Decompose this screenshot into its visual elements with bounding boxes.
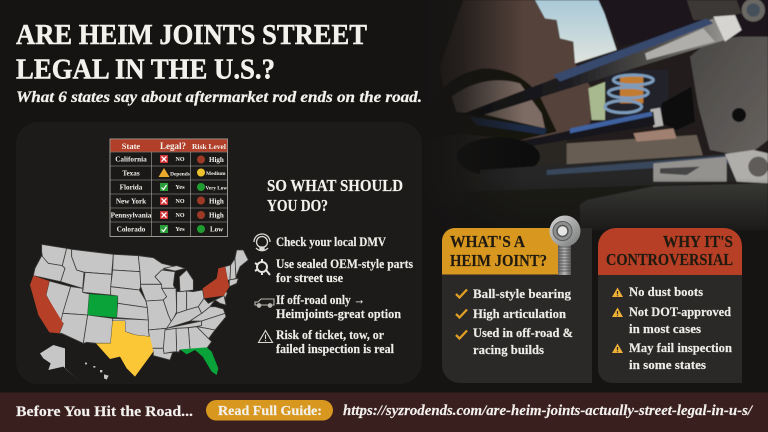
advice: risk: failed inspection is real (276, 342, 395, 356)
table: state legality: State (122, 141, 140, 151)
table: state legality: Texas (122, 170, 140, 178)
advice: off-road option: If off-road only → (276, 293, 365, 307)
heading: so what should you do: SO WHAT SHOULD (267, 176, 403, 195)
icon: off-road truck (255, 299, 274, 307)
advice: off-road option: Heimjoints-great option (276, 307, 401, 321)
title: LEGAL IN THE U.S.? (16, 54, 275, 86)
middle block (567, 135, 703, 167)
state: California (30, 276, 63, 333)
advice: sealed parts: Use sealed OEM-style parts (276, 257, 413, 271)
footer bar (0, 392, 768, 432)
heading: HEIM JOINT? (450, 251, 547, 270)
panel: why it's controversial (598, 228, 742, 383)
table: state legality: High (209, 212, 224, 220)
state: New York and Pennsylvania (203, 267, 229, 298)
table: state legality: High (209, 198, 224, 206)
table: state legality: High (209, 156, 224, 164)
heading: so what should you do: YOU DO? (267, 196, 328, 215)
advice: risk: Risk of ticket, tow, or (276, 328, 384, 342)
panel: states and advice (16, 122, 422, 384)
icon: warning triangle (258, 330, 272, 342)
card header (442, 228, 562, 274)
icon: gear and magnifier (255, 259, 270, 275)
heading: so what should you do (267, 176, 403, 215)
upper arm (463, 18, 730, 117)
advice: sealed parts (276, 257, 413, 285)
chassis dark top (598, 0, 768, 100)
title: ARE HEIM JOINTS STREET (16, 20, 367, 51)
tire tread (440, 0, 595, 140)
checklist: High articulation (473, 307, 566, 321)
table: state legality: Pennsylvania (111, 212, 152, 220)
side plate (690, 37, 768, 157)
heading: CONTROVERSIAL (606, 250, 733, 269)
panel: what's a heim joint (442, 216, 592, 383)
table: state legality: New York (116, 198, 146, 206)
icon: DMV badge (254, 234, 270, 251)
table: state legality: NO (176, 199, 185, 205)
footer link: https://syzrodends.com/are-heim-joints-actually-street-legal-in-u-s/ (343, 403, 754, 419)
wheel hub (420, 68, 557, 140)
state: Florida (180, 347, 218, 375)
warning list: May fail inspection (629, 341, 732, 355)
map: United States (30, 244, 248, 380)
heading (606, 232, 733, 269)
warning list: in most cases (629, 322, 701, 336)
table: state legality: NO (176, 213, 185, 219)
checklist: Ball-style bearing (473, 287, 572, 301)
footer lead text: Before You Hit the Road... (16, 404, 193, 420)
state: Texas (96, 321, 153, 377)
advice: sealed parts: for street use (276, 271, 343, 285)
table: state legality: Risk Level (192, 142, 226, 151)
table: state legality: Legal? (160, 141, 186, 151)
button: read full guide (206, 400, 333, 420)
road (580, 183, 768, 230)
photo: suspension arms (420, 0, 768, 240)
heading (450, 232, 547, 270)
warning list: in some states (629, 358, 706, 372)
state: Alaska (40, 345, 78, 380)
checklist: racing builds (473, 343, 544, 357)
subtitle: What 6 states say about aftermarket rod ends on the road. (16, 89, 422, 106)
inner boot (457, 137, 540, 176)
title (16, 20, 367, 86)
boot (662, 87, 695, 130)
table: state legality: Yes (175, 226, 185, 233)
table: state legality: Low (210, 226, 224, 234)
heading: WHY IT'S (663, 232, 733, 251)
state: Colorado (88, 294, 118, 318)
checklist: Used in off-road & (473, 326, 573, 340)
card header (598, 228, 742, 275)
table: state legality: Medium (206, 171, 226, 177)
warning list: Not DOT-approved (629, 305, 731, 319)
table: state legality: NO (176, 157, 185, 163)
lower arm (480, 153, 735, 193)
advice: risk (276, 328, 395, 356)
table: state legality: Depends (170, 171, 190, 177)
button: read full guide: Read Full Guide: (218, 403, 322, 418)
table: state legality: California (115, 156, 147, 164)
checklist (456, 287, 573, 357)
table: state legality: Yes (175, 184, 185, 191)
table: state legality (110, 139, 228, 236)
table: state legality: Florida (120, 184, 143, 192)
state: Hawaii (85, 363, 109, 380)
advice: off-road option (276, 293, 401, 321)
table: state legality: Very Low (206, 186, 227, 192)
advice: check DMV: Check your local DMV (276, 235, 386, 249)
table: state legality: Colorado (117, 226, 146, 234)
heading: WHAT'S A (450, 232, 526, 251)
spring (605, 70, 668, 120)
icon: heim joint (550, 216, 580, 275)
sky (535, 0, 617, 63)
warning list (612, 285, 732, 372)
mid tie rod (513, 112, 655, 148)
warning list: No dust boots (629, 285, 703, 299)
